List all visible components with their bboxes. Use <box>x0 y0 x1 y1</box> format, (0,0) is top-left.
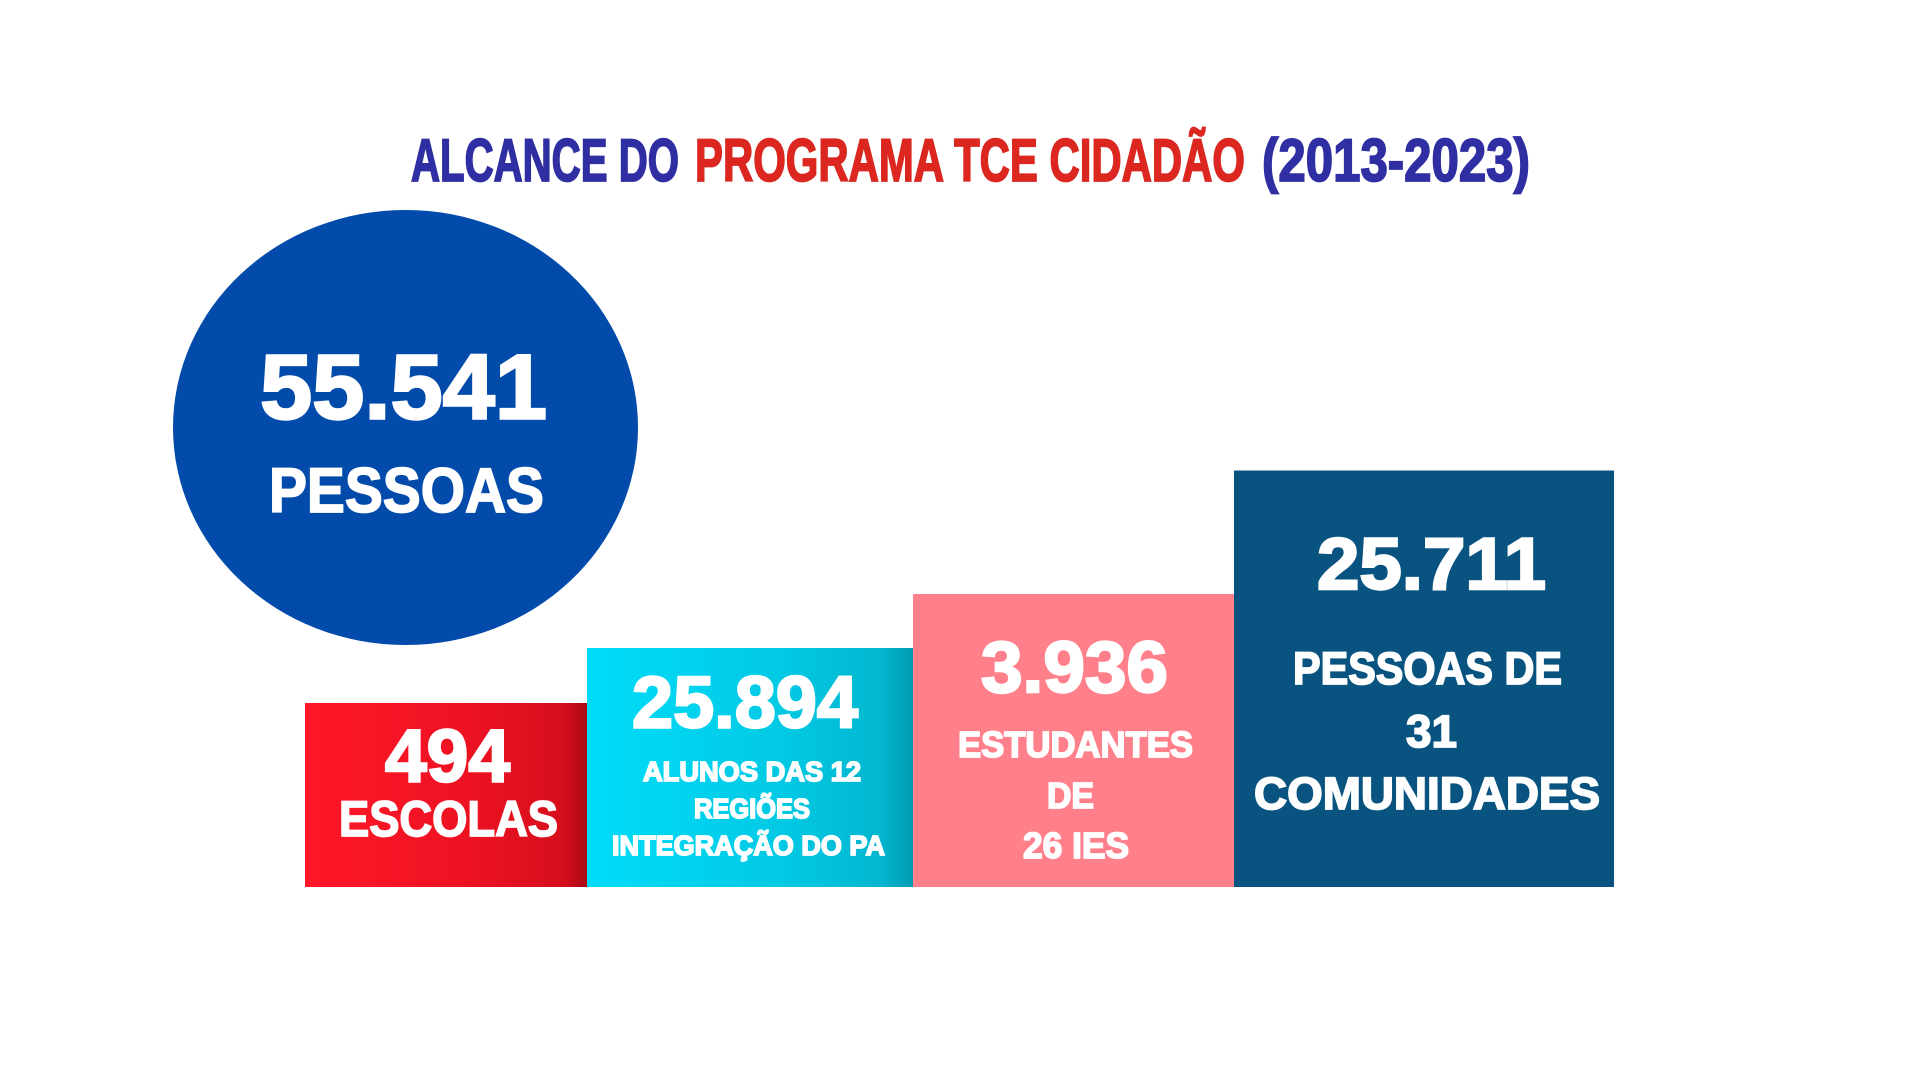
panel: total people circle: PESSOAS <box>269 456 544 526</box>
panel: total people circle: 55.541 <box>260 336 547 438</box>
panel: schools: 494 <box>385 714 510 798</box>
panel: communities: COMUNIDADES <box>1254 768 1600 819</box>
panel: students of the 12 regions <box>587 648 913 887</box>
panel: students of the 12 regions: REGIÕES <box>694 793 810 824</box>
panel: communities <box>1234 470 1614 887</box>
panel: schools: ESCOLAS <box>339 791 558 847</box>
panel: students of the 12 regions: 25.894 <box>632 662 858 744</box>
title: PROGRAMA TCE CIDADÃO <box>695 127 1245 194</box>
panel: university students <box>913 594 1234 887</box>
panel: communities: 31 <box>1406 706 1457 757</box>
title: (2013-2023) <box>1262 127 1530 194</box>
panel: university students: DE <box>1047 775 1094 816</box>
panel: communities: PESSOAS DE <box>1293 643 1562 694</box>
panel: university students: ESTUDANTES <box>958 724 1193 765</box>
panel: total people circle <box>173 210 638 645</box>
panel: students of the 12 regions: INTEGRAÇÃO DO PA <box>612 830 885 861</box>
title: ALCANCE DO <box>411 127 679 194</box>
panel: students of the 12 regions: ALUNOS DAS 12 <box>643 756 861 787</box>
panel: university students: 3.936 <box>981 628 1168 708</box>
panel: communities: 25.711 <box>1317 524 1546 605</box>
panel: schools <box>305 703 587 887</box>
panel: university students: 26 IES <box>1023 825 1129 866</box>
